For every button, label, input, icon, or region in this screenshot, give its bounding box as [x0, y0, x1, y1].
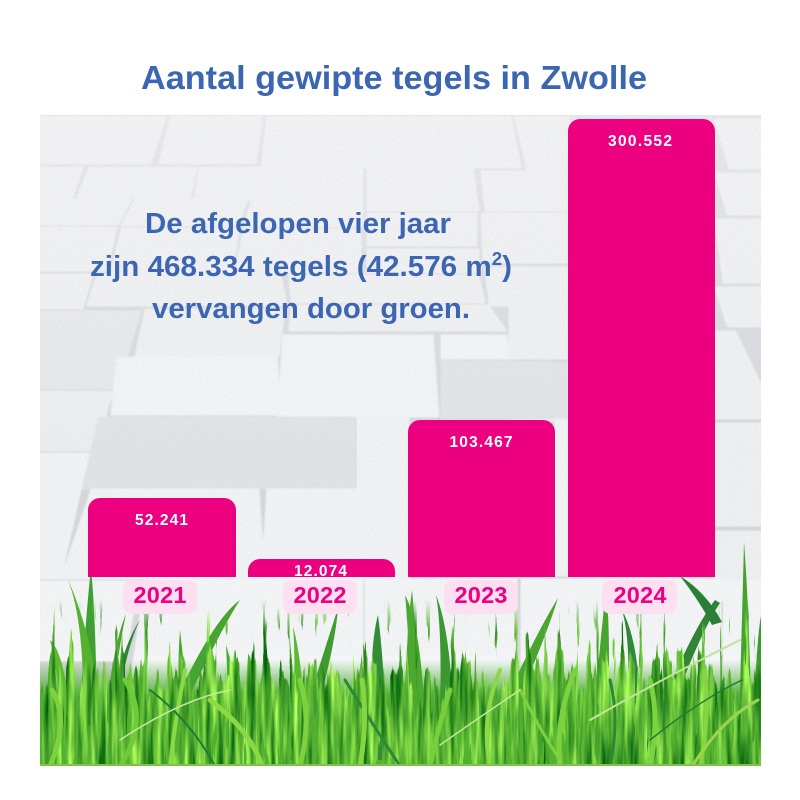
paving stones: [40, 115, 761, 690]
year label 2023: [444, 580, 518, 614]
year label 2022: [283, 580, 357, 614]
intro text block: [90, 208, 512, 325]
infographic: [40, 65, 761, 766]
bar 2022: [248, 559, 395, 580]
intro text block: ): [502, 251, 512, 283]
bar 2024: 300.552: [608, 133, 672, 150]
bar 2023: [408, 420, 555, 577]
grass: [40, 542, 761, 770]
bar chart: [88, 119, 715, 614]
intro text block: 2: [492, 249, 502, 269]
year label 2021: 2021: [134, 582, 186, 608]
year label 2021: [123, 580, 197, 614]
year label 2022: 2022: [294, 582, 346, 608]
intro text block: De afgelopen vier jaar: [145, 208, 451, 240]
intro text block: vervangen door groen.: [152, 293, 470, 325]
bar 2021: 52.241: [135, 512, 188, 529]
year label 2024: [602, 580, 677, 614]
bar 2021: [88, 498, 236, 577]
bar 2022: 12.074: [294, 563, 347, 580]
title: Aantal gewipte tegels in Zwolle: [141, 59, 647, 96]
tall grass blades: [50, 542, 761, 760]
bar 2023: 103.467: [450, 434, 512, 451]
background photo: paving stones and grass: [40, 115, 761, 770]
intro text block: zijn 468.334 tegels (42.576 m: [90, 251, 477, 283]
year label 2023: 2023: [454, 582, 508, 608]
bar 2024: [568, 119, 715, 577]
year label 2024: 2024: [614, 582, 666, 608]
